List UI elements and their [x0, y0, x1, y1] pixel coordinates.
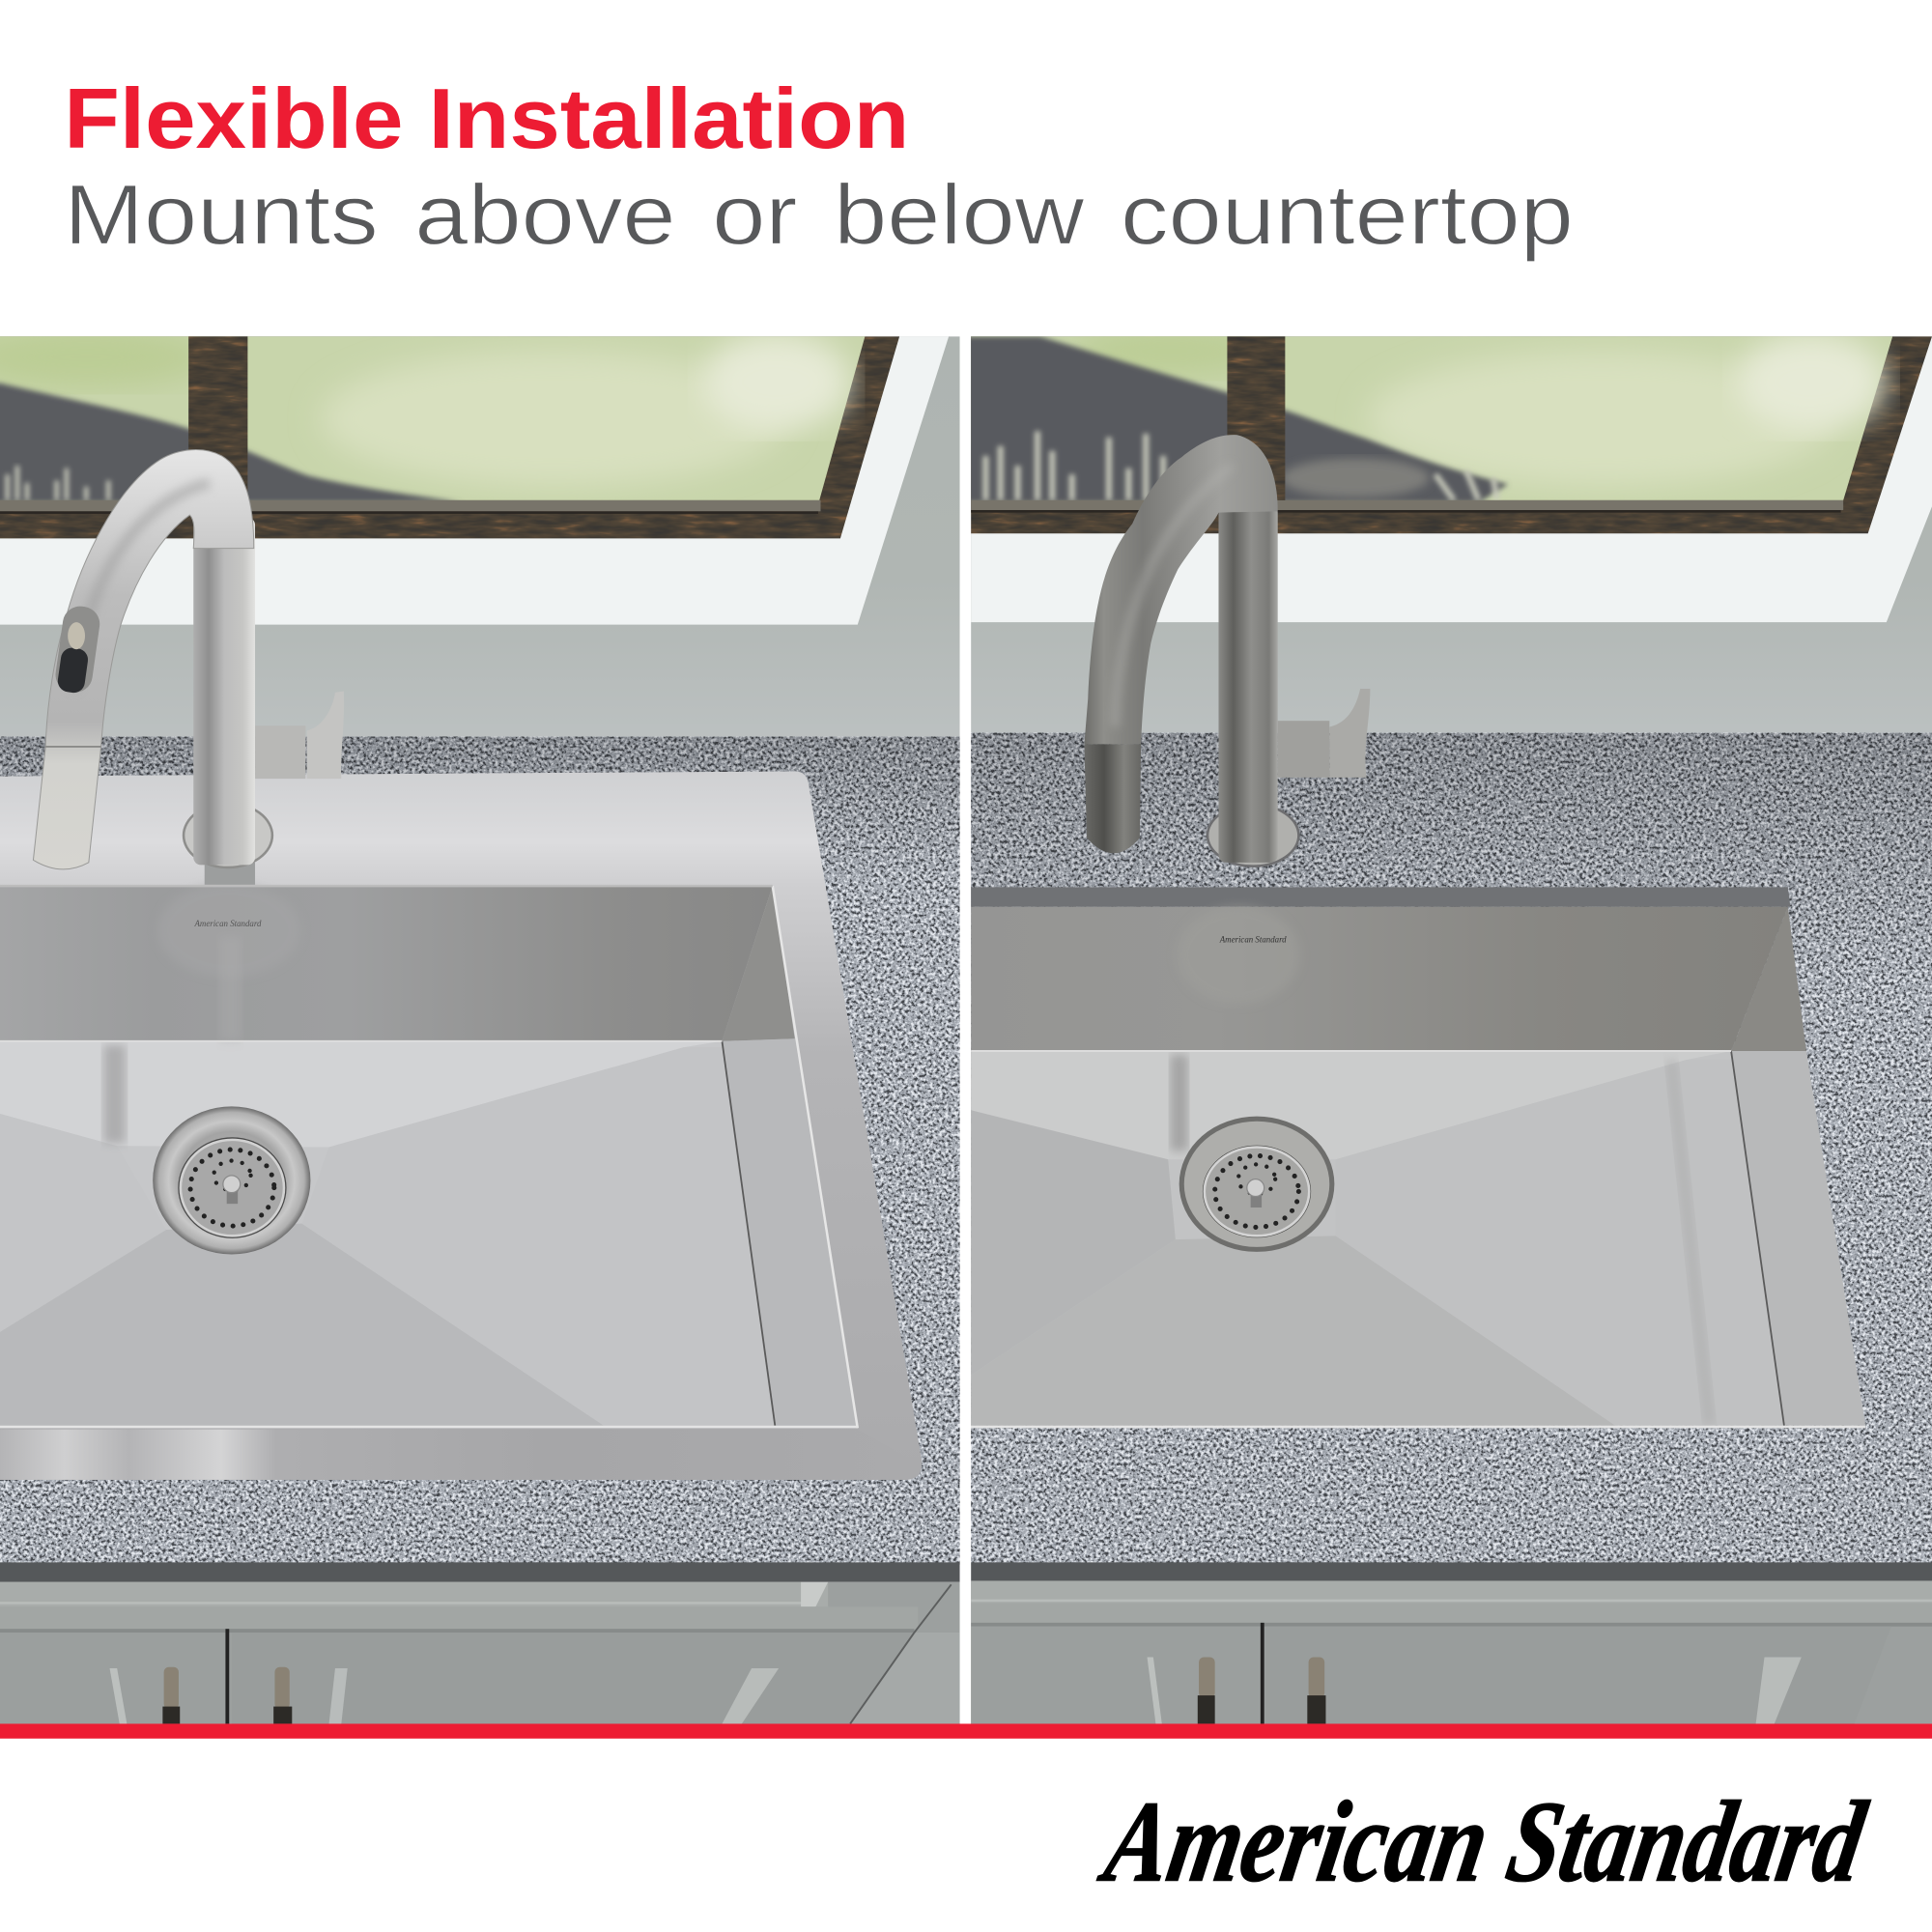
- drain strainer: [1179, 1117, 1334, 1252]
- subtitle: Mounts above or below countertop: [64, 167, 1574, 263]
- granite countertop: [971, 733, 1932, 1565]
- panel: under-counter (undermount) installation: [958, 327, 1932, 1723]
- granite countertop: [0, 737, 960, 1565]
- window sill reveal: [971, 336, 1932, 622]
- sink bowl: [0, 884, 858, 1428]
- drain strainer: [153, 1106, 310, 1254]
- window sill strip: [971, 500, 1843, 510]
- cabinet: [0, 1582, 960, 1723]
- window sill reveal: [0, 336, 949, 625]
- counter edge: [971, 1562, 1932, 1580]
- window glass with lawn: [958, 327, 1892, 502]
- counter edge: [0, 1562, 960, 1582]
- sink brand mark: American Standard: [1219, 935, 1287, 945]
- window sill strip: [0, 500, 820, 511]
- faucet: [33, 450, 344, 885]
- sink rim (top mount deck): [0, 771, 922, 1480]
- window frame: [971, 336, 1932, 533]
- window glass with lawn: [0, 327, 865, 502]
- wall: [971, 336, 1932, 743]
- sink bowl (undermount opening): [971, 887, 1865, 1427]
- faucet: [1084, 435, 1370, 867]
- red rule: [0, 1723, 1932, 1739]
- window mullion: [1227, 336, 1285, 502]
- window frame: [0, 336, 899, 538]
- title: Flexible Installation: [64, 71, 909, 166]
- panel: above-counter (top mount) installation: [0, 327, 960, 1723]
- cabinet: [971, 1580, 1932, 1723]
- wall: [0, 336, 960, 743]
- window mullion: [188, 336, 247, 502]
- sink brand mark: American Standard: [194, 919, 262, 928]
